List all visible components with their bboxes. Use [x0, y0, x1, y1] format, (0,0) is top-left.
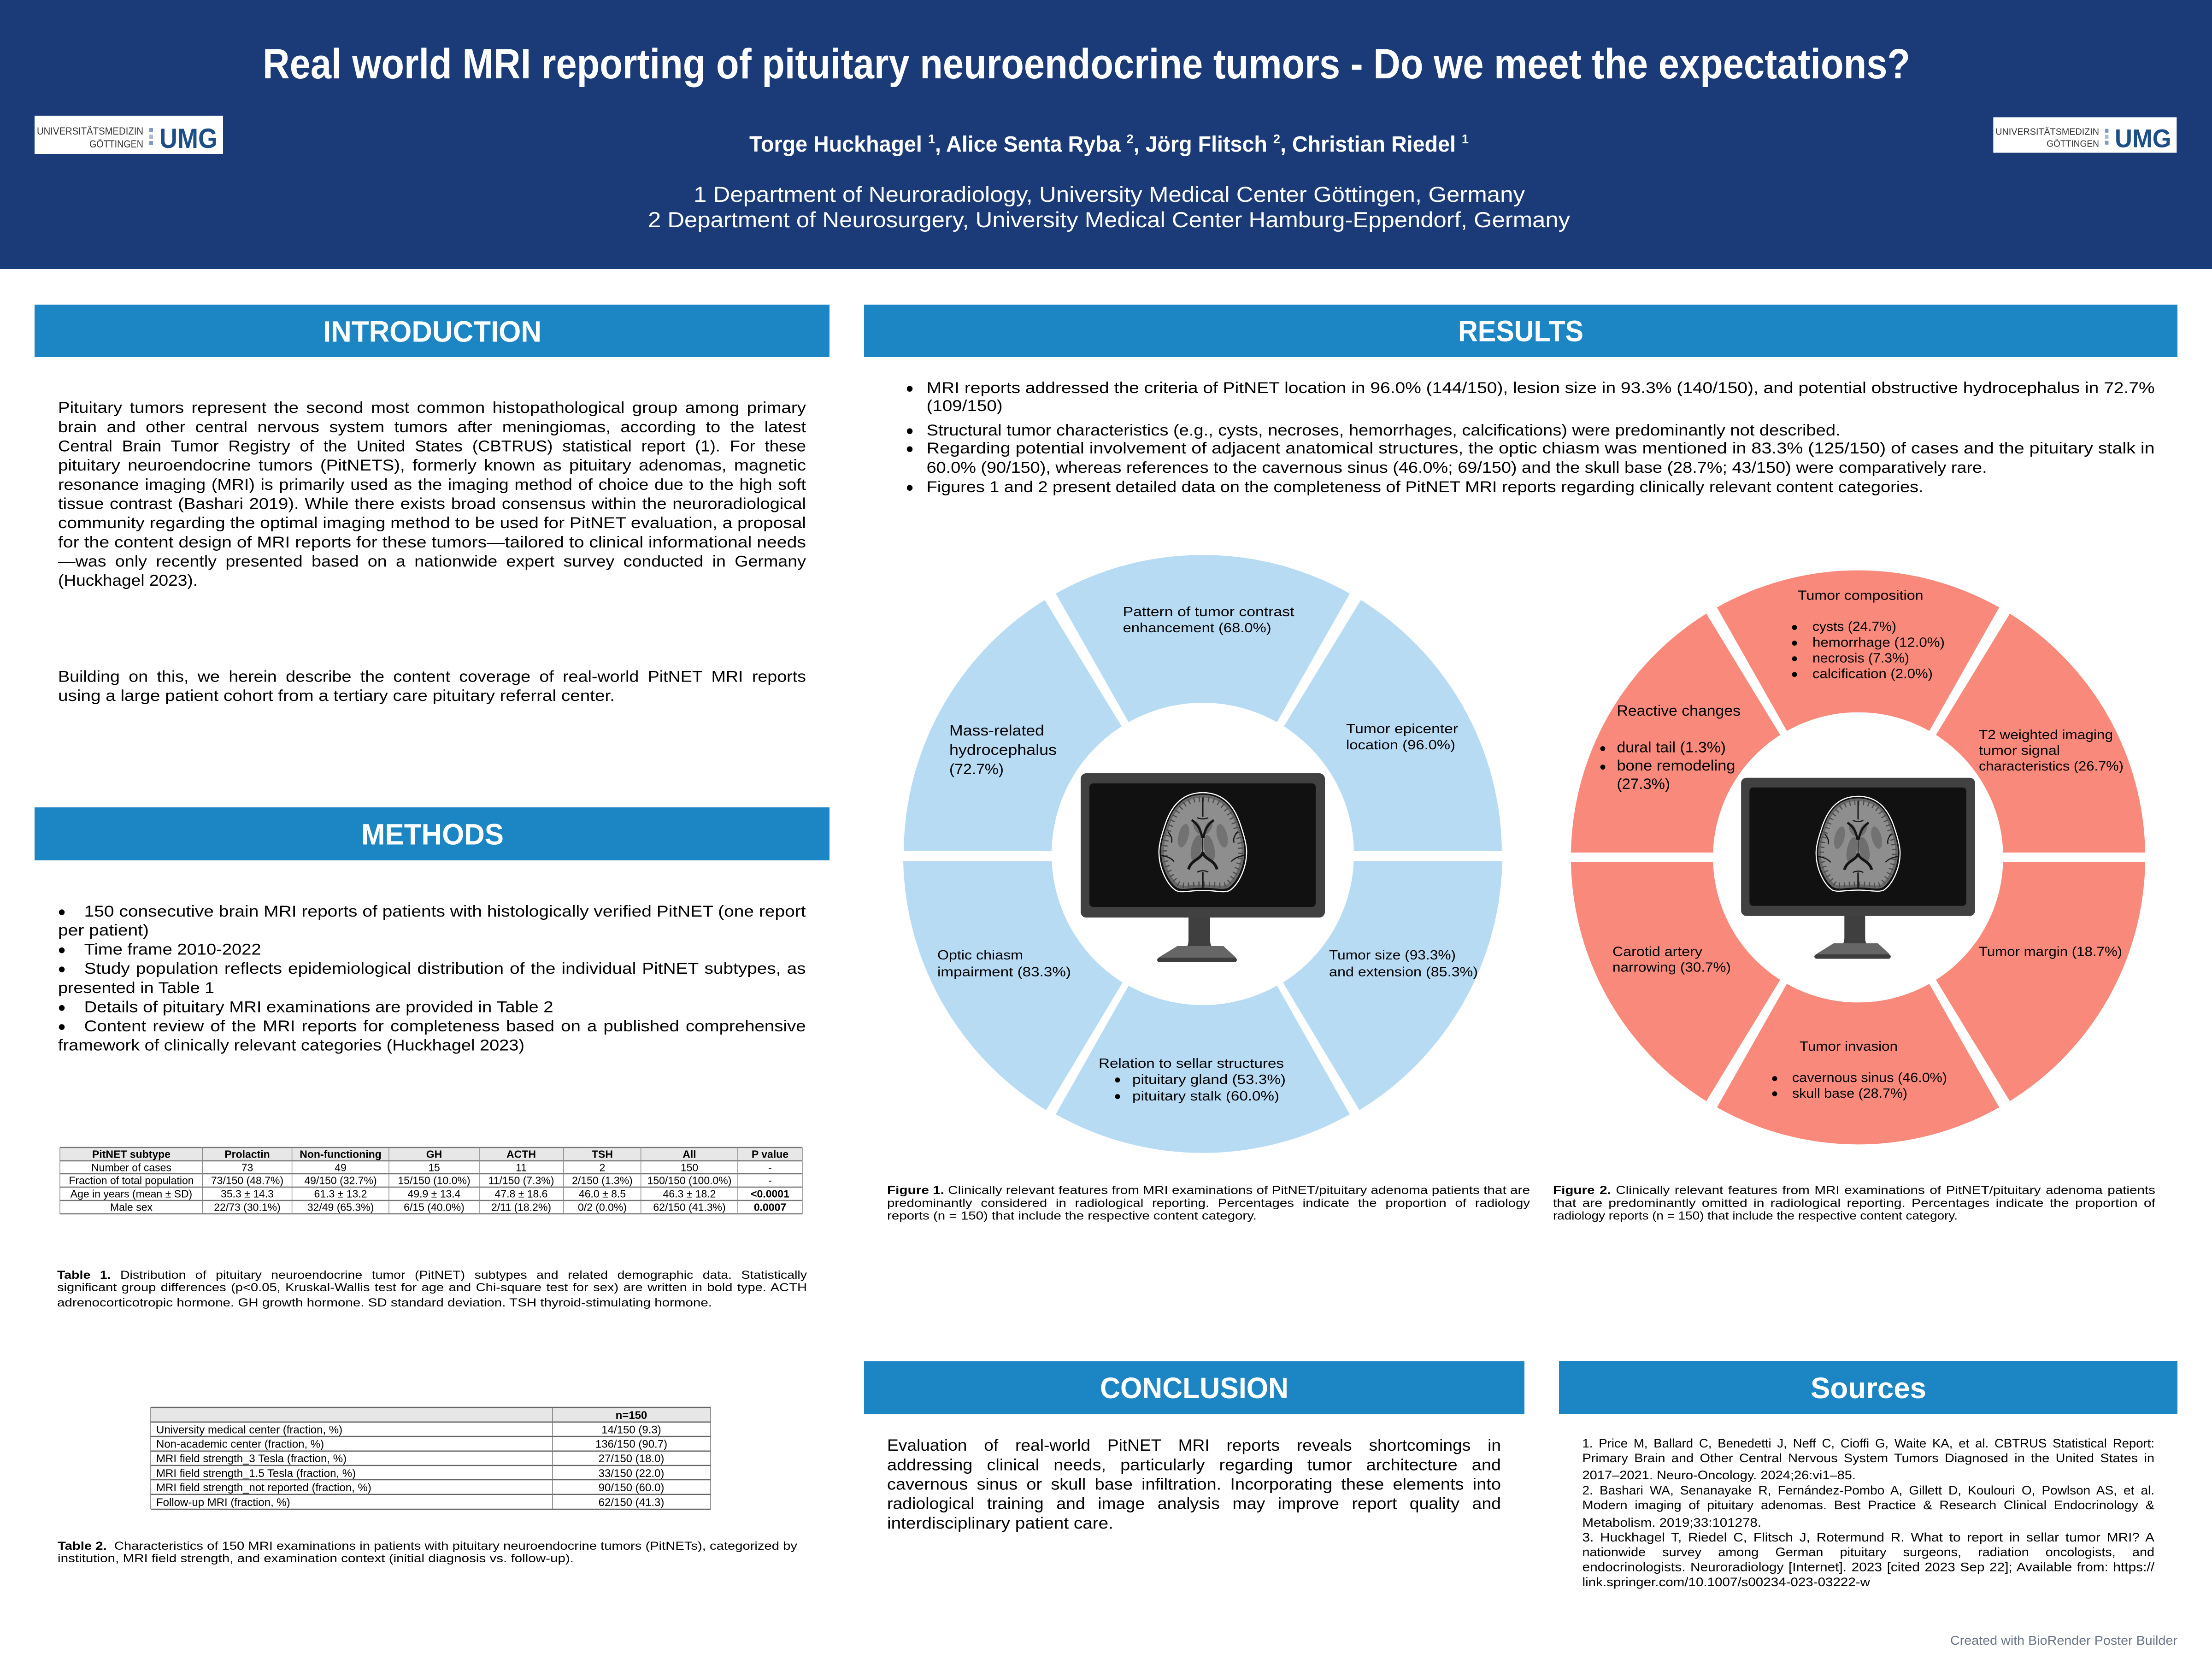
caption: figure 2: that are predominantly omitted in radiological reporting. Percentages indicate the proportion of	[1553, 1197, 2155, 1210]
caption: table 2	[58, 1540, 798, 1565]
text block: introduction paragraph 1: Pituitary tumors represent the second most common histopathological group among primary	[58, 399, 806, 417]
figure 1: donut of predominantly reported features	[903, 555, 1502, 1153]
text block: methods bullets: •	[58, 1015, 65, 1039]
table 1: PitNET subtypes: Age in years (mean ± SD)	[71, 1188, 192, 1200]
segment: tumor invasion	[1717, 984, 1999, 1144]
table 1: PitNET subtypes: GH	[426, 1148, 442, 1160]
text block: references	[1583, 1436, 2155, 1589]
table 1: PitNET subtypes: All	[682, 1148, 696, 1160]
table 1: PitNET subtypes: 2/150 (1.3%)	[572, 1174, 633, 1186]
table 2: MRI examination characteristics: Non-academic center (fraction, %)	[156, 1438, 324, 1451]
text block: conclusion: radiological training and image analysis may improve report quality and	[887, 1495, 1501, 1513]
segment: optic chiasm impairment	[903, 861, 1123, 1110]
segment: tumor composition: •	[1791, 618, 1798, 638]
segment: reactive changes: Reactive changes	[1617, 702, 1741, 719]
table 1: PitNET subtypes: 2	[600, 1162, 605, 1174]
table 1: PitNET subtypes: 73/150 (48.7%)	[211, 1174, 283, 1186]
text block: introduction paragraph 2: Building on this, we herein describe the content coverage of real-world PitNET MRI reports	[58, 668, 806, 686]
text block: references: link.springer.com/10.1007/s00234-023-03222-w	[1583, 1575, 1871, 1589]
segment: tumor composition: calcification (2.0%)	[1812, 667, 1933, 682]
caption: table 2: Table 2. Characteristics of 150 MRI examinations in patients with pituitary neuroendocrine tumors (PitNETs), categorized by	[58, 1540, 798, 1553]
segment: tumor composition: •	[1791, 665, 1798, 685]
table 1: PitNET subtypes: 47.8 ± 18.6	[495, 1188, 547, 1200]
segment: T2 weighted tumor signal	[1936, 614, 2145, 853]
text block: methods bullets: presented in Table 1	[58, 979, 214, 997]
caption: figure 2: radiology reports (n = 150) that include the respective content category.	[1553, 1209, 1958, 1222]
panel: conclusion	[864, 1361, 1524, 1532]
text block: methods bullets	[58, 900, 806, 1054]
table 1: PitNET subtypes: Male sex	[110, 1201, 153, 1213]
text block: methods bullets: Content review of the MRI reports for completeness based on a published comprehensive	[84, 1018, 806, 1035]
text block: methods bullets: •	[58, 996, 65, 1020]
segment: tumor epicenter location: location (96.0%)	[1346, 738, 1455, 753]
segment: relation to sellar structures: Relation to sellar structures	[1099, 1056, 1284, 1071]
caption: figure 1	[887, 1184, 1530, 1222]
text block: references: 3. Huckhagel T, Riedel C, Flitsch J, Rotermund R. What to report in sellar tumor MRI? A	[1583, 1530, 2154, 1544]
authors: , Christian Riedel	[1280, 132, 1462, 157]
segment: carotid artery narrowing	[1571, 862, 1780, 1101]
table 1: PitNET subtypes: 6/15 (40.0%)	[404, 1201, 465, 1213]
panel: sources	[1559, 1361, 2177, 1589]
caption: figure 2: Figure 2. Clinically relevant features from MRI examinations of PitNET/pituitary adenoma patients	[1553, 1184, 2155, 1197]
segment: pattern of contrast enhancement: enhancement (68.0%)	[1123, 621, 1271, 635]
text block: results bullets: •	[906, 476, 913, 500]
text block: results bullets: •	[906, 437, 913, 461]
table 2: MRI examination characteristics: MRI field strength_3 Tesla (fraction, %)	[156, 1453, 347, 1465]
table 1: PitNET subtypes: 0.0007	[754, 1201, 786, 1213]
segment: reactive changes: •	[1600, 757, 1606, 777]
segment: optic chiasm impairment: impairment (83.3%)	[937, 965, 1071, 980]
segment: tumor composition: •	[1791, 649, 1798, 669]
text block: results bullets	[906, 377, 2155, 500]
text block: introduction paragraph 1: pituitary neuroendocrine tumors (PitNETS), formerly known as pituitary adenomas, magnetic	[58, 457, 806, 474]
text block: introduction paragraph 1: for the content design of MRI reports for these tumors—tailored to clinical informational needs	[58, 534, 806, 551]
table 2: MRI examination characteristics: 14/150 (9.3)	[601, 1424, 661, 1436]
heading: results	[864, 305, 2177, 357]
table 1: PitNET subtypes: Prolactin	[224, 1148, 270, 1160]
segment: mass-related hydrocephalus: (72.7%)	[949, 761, 1004, 777]
text block: introduction paragraph 2	[58, 668, 806, 705]
segment: T2 weighted tumor signal: characteristics (26.7%)	[1979, 759, 2124, 774]
table 1: PitNET subtypes: 150	[681, 1162, 698, 1174]
segment: pattern of contrast enhancement	[1056, 555, 1350, 722]
segment: tumor composition: cysts (24.7%)	[1812, 619, 1896, 634]
text block: references: 1. Price M, Ballard C, Benedetti J, Neff C, Cioffi G, Waite KA, et al. CBTRUS Statistical Report:	[1583, 1436, 2154, 1450]
caption: figure 2	[1553, 1184, 2155, 1222]
panel: results	[864, 305, 2177, 1222]
text block: introduction paragraph 1: tissue contrast (Bashari 2019). While there exists broad consensus within the neuroradiological	[58, 495, 806, 513]
segment: relation to sellar structures	[1056, 986, 1350, 1153]
text block: conclusion: addressing clinical needs, particularly regarding tumor architecture and	[887, 1456, 1501, 1474]
text block: results bullets: Structural tumor characteristics (e.g., cysts, necroses, hemorrhages, calcifications) were predominantly not described.	[927, 422, 1841, 439]
table 2: MRI examination characteristics: MRI field strength_1.5 Tesla (fraction, %)	[156, 1467, 356, 1480]
table 1: PitNET subtypes: TSH	[592, 1148, 613, 1160]
segment: tumor composition: •	[1791, 633, 1798, 653]
table 1: PitNET subtypes: 11/150 (7.3%)	[488, 1174, 554, 1186]
text block: conclusion: interdisciplinary patient care.	[887, 1514, 1113, 1532]
table 1: PitNET subtypes: <0.0001	[751, 1188, 789, 1200]
segment: carotid artery narrowing: Carotid artery	[1612, 945, 1703, 959]
segment: reactive changes	[1571, 614, 1780, 853]
caption: figure 1: predominantly considered in radiological reporting. Percentages indicate the proportion of radiology	[887, 1197, 1530, 1210]
caption: figure 1: Figure 1. Clinically relevant features from MRI examinations of PitNET/pituitary adenoma patients that are	[887, 1184, 1530, 1197]
authors: 2	[1127, 132, 1134, 146]
segment: relation to sellar structures: •	[1114, 1070, 1121, 1090]
table 2: MRI examination characteristics	[151, 1407, 711, 1509]
caption: table 1: Table 1. Distribution of pituitary neuroendocrine tumor (PitNET) subtypes and related demographic data. Statistically	[57, 1269, 807, 1282]
heading: results: RESULTS	[1458, 315, 1583, 348]
table 1: PitNET subtypes: 15	[428, 1162, 440, 1174]
text block: methods bullets: Time frame 2010-2022	[84, 941, 261, 958]
text block: references: Primary Brain and Other Central Nervous System Tumors Diagnosed in the United States in	[1583, 1451, 2154, 1465]
text block: introduction paragraph 1: —was only recently presented based on a nationwide expert survey conducted in Germany	[58, 553, 806, 571]
segment: reactive changes: (27.3%)	[1617, 776, 1670, 792]
segment: mass-related hydrocephalus: Mass-related	[949, 722, 1044, 739]
table 1: PitNET subtypes: 11	[516, 1162, 527, 1174]
text block: conclusion	[887, 1436, 1501, 1532]
affiliation 1: 1 Department of Neuroradiology, University Medical Center Göttingen, Germany	[694, 182, 1525, 206]
text block: results bullets: 60.0% (90/150), whereas references to the cavernous sinus (46.0%; 69/150) and the skull base (28.7%; 43/150) were comparatively rare.	[927, 459, 1987, 477]
table 2: MRI examination characteristics: Follow-up MRI (fraction, %)	[156, 1496, 290, 1509]
segment: T2 weighted tumor signal: T2 weighted imaging	[1979, 728, 2113, 742]
table 2: MRI examination characteristics: 90/150 (60.0)	[599, 1482, 664, 1494]
segment: tumor invasion: cavernous sinus (46.0%)	[1792, 1071, 1947, 1085]
logo left: UMG	[35, 116, 223, 154]
table 1: PitNET subtypes: 49	[335, 1162, 347, 1174]
table 1: PitNET subtypes: 49/150 (32.7%)	[304, 1174, 377, 1186]
text block: results bullets: Regarding potential involvement of adjacent anatomical structures, the optic chiasm was mentioned in 83.3% (125/150) of cases and the pituitary stalk in	[927, 440, 2155, 457]
segment: tumor invasion: •	[1771, 1084, 1778, 1104]
text block: introduction paragraph 1: community regarding the optimal imaging method to be used for PitNET evaluation, a proposal	[58, 514, 806, 532]
table 1: PitNET subtypes: Fraction of total population	[69, 1174, 194, 1186]
segment: relation to sellar structures: pituitary gland (53.3%)	[1132, 1072, 1286, 1087]
table 1: PitNET subtypes: 22/73 (30.1%)	[214, 1201, 281, 1213]
heading: conclusion: CONCLUSION	[1100, 1371, 1288, 1405]
table 1: PitNET subtypes: 62/150 (41.3%)	[653, 1201, 726, 1213]
text block: introduction paragraph 1: (Huckhagel 2023).	[58, 572, 198, 589]
segment: reactive changes: bone remodeling	[1617, 757, 1735, 774]
segment: mass-related hydrocephalus	[904, 600, 1122, 851]
segment: tumor size and extension	[1283, 861, 1502, 1110]
text block: introduction paragraph 1: resonance imaging (MRI) is primarily used as the imaging method of choice due to the high soft	[58, 476, 806, 494]
icon: monitor with brain MRI, figure 1	[1081, 773, 1325, 962]
table 1: PitNET subtypes: ACTH	[506, 1148, 536, 1160]
table 1: PitNET subtypes: 46.0 ± 8.5	[579, 1188, 626, 1200]
segment: tumor composition: necrosis (7.3%)	[1812, 651, 1909, 666]
table 1: PitNET subtypes: -	[768, 1174, 772, 1186]
table 1: PitNET subtypes: 35.3 ± 14.3	[221, 1188, 274, 1200]
segment: reactive changes: •	[1600, 739, 1606, 759]
authors: 2	[1273, 132, 1280, 146]
table 1: PitNET subtypes: PitNET subtype	[92, 1148, 171, 1160]
heading: introduction: INTRODUCTION	[323, 315, 541, 348]
table 1: PitNET subtypes: 150/150 (100.0%)	[647, 1174, 731, 1186]
affiliation 2: 2 Department of Neurosurgery, University Medical Center Hamburg-Eppendorf, Germany	[648, 207, 1571, 232]
figure 2: donut of predominantly omitted features	[1571, 571, 2145, 1144]
segment: carotid artery narrowing: narrowing (30.7%)	[1612, 960, 1731, 975]
heading: methods: METHODS	[361, 818, 504, 851]
table 1: PitNET subtypes: 0/2 (0.0%)	[578, 1201, 627, 1213]
table 2: MRI examination characteristics: 27/150 (18.0)	[599, 1453, 664, 1465]
segment: relation to sellar structures: •	[1114, 1087, 1121, 1107]
text block: results bullets: Figures 1 and 2 present detailed data on the completeness of PitNET MRI reports regarding clinically relevant content categories.	[927, 478, 1924, 496]
table 1: PitNET subtypes	[60, 1147, 802, 1214]
table 1: PitNET subtypes: 61.3 ± 13.2	[314, 1188, 367, 1200]
heading: introduction	[35, 305, 830, 357]
poster header band	[0, 0, 2212, 269]
text block: methods bullets: Details of pituitary MRI examinations are provided in Table 2	[84, 999, 553, 1016]
segment: mass-related hydrocephalus: hydrocephalus	[949, 741, 1057, 758]
caption: figure 1: reports (n = 150) that include the respective content category.	[887, 1209, 1257, 1222]
text block: methods bullets: Study population reflects epidemiological distribution of the individual PitNET subtypes, as	[84, 960, 806, 977]
table 2: MRI examination characteristics: 62/150 (41.3)	[599, 1496, 664, 1509]
authors: Torge Huckhagel	[749, 132, 927, 157]
segment: T2 weighted tumor signal: tumor signal	[1979, 743, 2060, 758]
caption: table 1	[57, 1269, 807, 1309]
panel: methods	[35, 807, 830, 1565]
text block: references: Modern imaging of pituitary adenomas. Best Practice & Research Clinical Endocrinology &	[1583, 1498, 2154, 1512]
text block: references: 2. Bashari WA, Senanayake R, Fernández-Pombo A, Gillett D, Koulouri O, Powlson AS, et al.	[1583, 1483, 2154, 1497]
icon: monitor with brain MRI, figure 2	[1741, 778, 1975, 959]
text block: methods bullets: 150 consecutive brain MRI reports of patients with histologically verified PitNET (one report	[84, 903, 806, 920]
segment: tumor composition: Tumor composition	[1798, 588, 1924, 603]
caption: table 2: institution, MRI field strength, and examination context (initial diagnosis vs. follow-up).	[58, 1552, 574, 1565]
table 1: PitNET subtypes: 2/11 (18.2%)	[491, 1201, 551, 1213]
heading: sources: Sources	[1811, 1371, 1926, 1405]
panel: introduction	[35, 305, 830, 705]
footer credit: Created with BioRender Poster Builder	[1950, 1633, 2177, 1647]
text block: methods bullets: •	[58, 957, 65, 981]
text block: results bullets: •	[906, 419, 913, 443]
segment: tumor invasion: skull base (28.7%)	[1792, 1086, 1907, 1101]
table 2: MRI examination characteristics: n=150	[616, 1409, 647, 1422]
segment: tumor margin	[1936, 862, 2145, 1101]
table 2: MRI examination characteristics: University medical center (fraction, %)	[156, 1424, 342, 1436]
segment: tumor invasion: Tumor invasion	[1800, 1039, 1898, 1054]
segment: tumor epicenter location	[1284, 600, 1502, 851]
heading: methods	[35, 807, 830, 860]
text block: introduction paragraph 1: brain and other central nervous system tumors after meningiomas, according to the latest	[58, 418, 806, 436]
table 1: PitNET subtypes: Non-functioning	[300, 1148, 382, 1160]
table 2: MRI examination characteristics: 33/150 (22.0)	[599, 1467, 664, 1480]
table 1: PitNET subtypes: 15/150 (10.0%)	[398, 1174, 471, 1186]
text block: methods bullets: •	[58, 900, 65, 924]
segment: reactive changes: dural tail (1.3%)	[1617, 739, 1726, 756]
table 1: PitNET subtypes: Number of cases	[91, 1162, 171, 1174]
table 1: PitNET subtypes: -	[768, 1162, 772, 1174]
caption: table 1: significant group differences (p<0.05, Kruskal-Wallis test for age and Chi-square test for sex) are written in bold type. ACTH	[57, 1281, 807, 1294]
text block: methods bullets: framework of clinically relevant categories (Huckhagel 2023)	[58, 1037, 524, 1054]
text block: references: 2017–2021. Neuro-Oncology. 2024;26:vi1–85.	[1583, 1468, 1856, 1482]
caption: table 1: adrenocorticotropic hormone. GH growth hormone. SD standard deviation. TSH thyroid-stimulating hormone.	[57, 1296, 712, 1309]
segment: tumor epicenter location: Tumor epicenter	[1346, 722, 1458, 736]
text block: methods bullets: •	[58, 938, 65, 962]
authors: 1	[1462, 132, 1469, 146]
segment: tumor size and extension: and extension (85.3%)	[1329, 965, 1478, 980]
text block: results bullets: •	[906, 377, 913, 400]
table 2: MRI examination characteristics: 136/150 (90.7)	[595, 1438, 667, 1451]
text block: conclusion: Evaluation of real-world PitNET MRI reports reveals shortcomings in	[887, 1436, 1501, 1454]
segment: tumor margin: Tumor margin (18.7%)	[1979, 945, 2122, 959]
text block: references: Metabolism. 2019;33:101278.	[1583, 1516, 1761, 1530]
segment: tumor composition: hemorrhage (12.0%)	[1812, 635, 1945, 650]
text block: results bullets: MRI reports addressed the criteria of PitNET location in 96.0% (144/150), lesion size in 93.3% (140/150), and potential obstructive hydrocephalus in 72.7%	[927, 379, 2155, 397]
authors: , Jörg Flitsch	[1134, 132, 1273, 157]
segment: relation to sellar structures: pituitary stalk (60.0%)	[1132, 1089, 1279, 1104]
logo right: UMG	[1993, 117, 2177, 153]
text block: references: endocrinologists. Neuroradiology [Internet]. 2023 [cited 2023 Sep 22]; Available from: https://	[1583, 1560, 2155, 1574]
segment: tumor size and extension: Tumor size (93.3%)	[1329, 948, 1456, 963]
table 1: PitNET subtypes: 73	[241, 1162, 253, 1174]
table 1: PitNET subtypes: 49.9 ± 13.4	[408, 1188, 461, 1200]
text block: results bullets: (109/150)	[927, 397, 1003, 415]
text block: introduction paragraph 2: using a large patient cohort from a tertiary care pituitary referral center.	[58, 687, 615, 705]
table 1: PitNET subtypes: P value	[752, 1148, 788, 1160]
segment: tumor composition	[1717, 571, 1999, 731]
segment: pattern of contrast enhancement: Pattern of tumor contrast	[1123, 605, 1294, 619]
text block: introduction paragraph 1: Central Brain Tumor Registry of the United States (CBTRUS) statistical report (1). For these	[58, 438, 806, 455]
text block: references: nationwide survey among German pituitary surgeons, radiation oncologists, and	[1583, 1545, 2154, 1559]
table 2: MRI examination characteristics: MRI field strength_not reported (fraction, %)	[156, 1482, 371, 1494]
authors: , Alice Senta Ryba	[935, 132, 1127, 157]
text block: methods bullets: per patient)	[58, 922, 149, 939]
heading: conclusion	[864, 1361, 1524, 1414]
table 1: PitNET subtypes: 46.3 ± 18.2	[663, 1188, 716, 1200]
segment: tumor invasion: •	[1771, 1069, 1778, 1089]
text block: conclusion: cavernous sinus or skull base infiltration. Incorporating these elements into	[887, 1476, 1501, 1494]
segment: optic chiasm impairment: Optic chiasm	[937, 948, 1023, 963]
authors: 1	[928, 132, 935, 146]
table 1: PitNET subtypes: 32/49 (65.3%)	[307, 1201, 374, 1213]
title: Real world MRI reporting of pituitary neuroendocrine tumors - Do we meet the expectations?	[263, 41, 1910, 88]
text block: introduction paragraph 1	[58, 399, 806, 589]
heading: sources	[1559, 1361, 2177, 1414]
